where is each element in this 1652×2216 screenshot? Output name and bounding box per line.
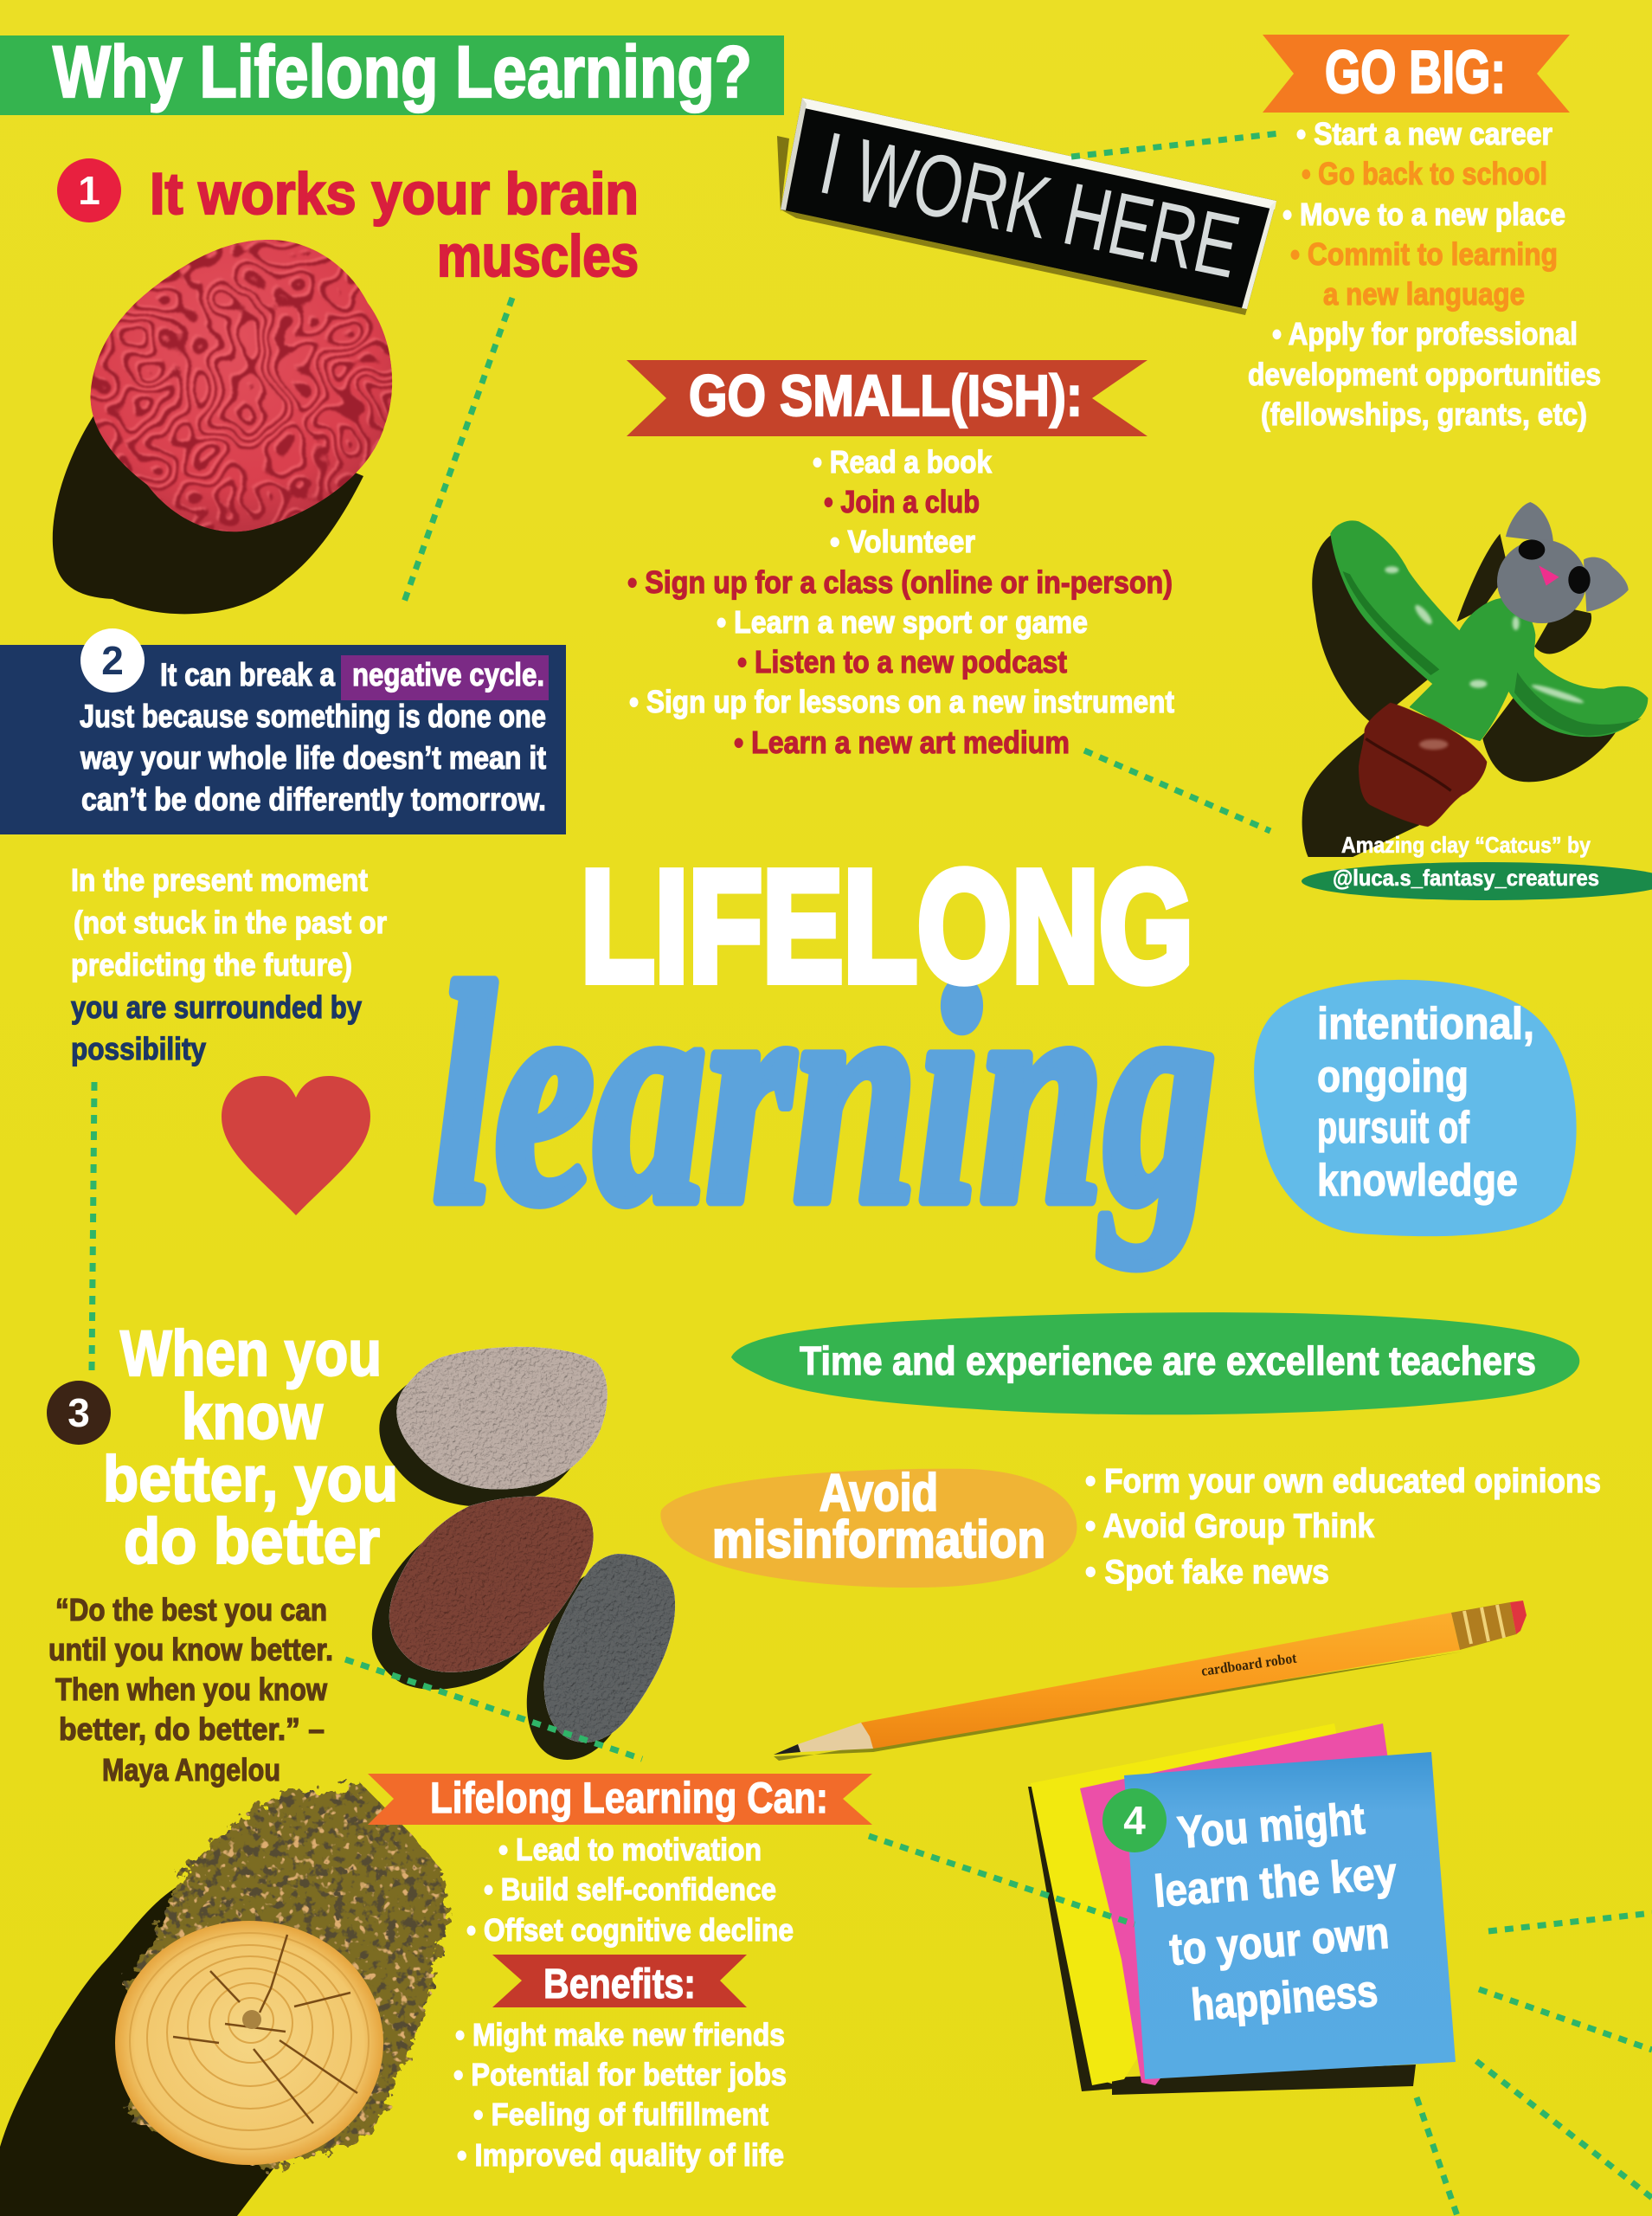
dotted connector (345, 1659, 642, 1759)
blob: definition: pursuit of (1317, 1103, 1469, 1153)
body text: can’t be done differently tomorrow. (81, 782, 546, 817)
list: avoid misinformation (1085, 1463, 1601, 1591)
list: • Sign up for a class (online or in-person) (627, 564, 1173, 600)
main title: learning (433, 920, 1216, 1268)
list: benefits (453, 2017, 787, 2173)
number badge 2: 2 (101, 638, 124, 683)
text block: present moment: predicting the future) (71, 947, 352, 982)
text block: present moment: possibility (71, 1031, 206, 1066)
list: can (466, 1832, 794, 1948)
panel: go small (627, 360, 1174, 760)
body text (80, 657, 546, 817)
list: • Volunteer (830, 524, 975, 559)
note text: to your own (1167, 1908, 1391, 1975)
list: can: • Build self-confidence (484, 1871, 776, 1907)
wood slice photo (0, 1781, 448, 2216)
note text (1152, 1794, 1398, 2031)
list: • Learn a new sport or game (717, 604, 1088, 640)
caption: catcus credit: Amazing clay “Catcus” by (1341, 832, 1591, 858)
list: • Start a new career (1296, 116, 1552, 151)
heading: it works your brain muscles (150, 161, 639, 289)
list: • Read a book (813, 444, 993, 480)
quote (48, 1592, 333, 1788)
text block: present moment: (not stuck in the past or (74, 905, 387, 940)
list: • Move to a new place (1282, 196, 1565, 232)
quote: better, do better.” – (59, 1711, 325, 1747)
blob: avoid misinformation: misinformation (712, 1511, 1045, 1569)
panel: lifelong learning can (0, 1774, 872, 2216)
list: • Listen to a new podcast (737, 644, 1067, 680)
ribbon heading: GO SMALL(ISH): (689, 364, 1083, 428)
number badge 4 (1102, 1788, 1167, 1852)
list: development opportunities (1248, 357, 1601, 392)
list: • Join a club (824, 484, 980, 519)
body text: It can break a (160, 657, 335, 692)
heading: when you know better: When you (120, 1317, 382, 1389)
dotted connector (1071, 133, 1280, 157)
quote: Then when you know (55, 1672, 328, 1707)
text block: present moment: In the present moment (71, 862, 368, 898)
ribbon: benefits: Benefits: (543, 1962, 696, 2007)
list: (fellowships, grants, etc) (1261, 396, 1587, 432)
name badge photo: I work here (777, 98, 1276, 315)
panel: go big (1248, 35, 1601, 432)
list: • Sign up for lessons on a new instrument (629, 684, 1174, 719)
list: benefits: • Improved quality of life (457, 2137, 784, 2173)
note text: learn the key (1152, 1848, 1398, 1917)
body text: Just because something is done one (80, 699, 546, 734)
heading: when you know better: better, you (103, 1443, 398, 1515)
blob: avoid misinformation: Avoid (820, 1464, 938, 1522)
main title: LIFELONG (581, 837, 1193, 1015)
brain photo (53, 240, 392, 614)
blob: time and experience (731, 1312, 1579, 1414)
list: • Learn a new art medium (734, 725, 1070, 760)
blob: definition: intentional, (1317, 999, 1534, 1049)
list: benefits: • Might make new friends (455, 2017, 785, 2052)
main title (433, 837, 1216, 1268)
panel: reason 4 sticky notes (1028, 1723, 1456, 2095)
list: avoid misinformation: • Form your own educated opinions (1085, 1463, 1601, 1500)
number badge 3: 3 (67, 1390, 90, 1435)
note text: happiness (1189, 1966, 1379, 2031)
ribbon heading (1263, 35, 1570, 113)
note shadow (1028, 1787, 1416, 2095)
list: avoid misinformation: • Spot fake news (1085, 1554, 1329, 1591)
heading: when you know better: do better (124, 1505, 380, 1577)
yellow note (1031, 1723, 1337, 2085)
list (627, 444, 1174, 760)
quote: Maya Angelou (102, 1752, 280, 1788)
number badge 4: 4 (1123, 1798, 1146, 1843)
panel: reason 1 (53, 158, 639, 614)
list: benefits: • Potential for better jobs (453, 2057, 787, 2092)
stones photo (372, 1347, 675, 1760)
dotted connectors around note (869, 1836, 1652, 2216)
blob: time and experience: Time and experience are excellent teachers (800, 1338, 1536, 1383)
number badge 1 (57, 158, 121, 222)
pink note (1080, 1723, 1389, 2085)
ribbon: lifelong learning can: Lifelong Learning Can: (430, 1774, 828, 1822)
note text: You might (1175, 1794, 1366, 1858)
list: a new language (1323, 276, 1525, 312)
body text: way your whole life doesn’t mean it (80, 740, 546, 776)
quote: until you know better. (48, 1632, 333, 1667)
clay catcus photo (1302, 502, 1647, 857)
caption: catcus credit: @luca.s_fantasy_creatures (1333, 865, 1599, 891)
number badge 1: 1 (78, 168, 100, 213)
pencil photo (774, 1601, 1527, 1761)
heading: when you know better (103, 1317, 398, 1577)
blob: definition: knowledge (1317, 1156, 1518, 1206)
name badge photo: I work here: I WORK HERE (813, 113, 1247, 297)
list: can: • Offset cognitive decline (466, 1912, 794, 1948)
dotted connector (92, 1082, 94, 1371)
panel: reason 3 (47, 1317, 675, 1788)
heading: it works your brain muscles: It works your brain (150, 161, 639, 227)
number badge 2 (80, 628, 145, 692)
icon: heart (222, 1076, 370, 1215)
blob: definition (1254, 980, 1577, 1236)
list: • Commit to learning (1290, 236, 1558, 272)
blob: avoid misinformation (660, 1464, 1077, 1588)
list: can: • Lead to motivation (498, 1832, 762, 1867)
highlight: negative cycle: negative cycle. (352, 657, 544, 692)
title banner: Why Lifelong Learning? (53, 31, 752, 113)
highlight: negative cycle (341, 655, 549, 700)
panel: reason 2 (0, 628, 566, 834)
dotted connector (403, 298, 512, 604)
number badge 3 (47, 1381, 111, 1445)
list: • Go back to school (1302, 156, 1547, 191)
pencil photo: cardboard robot (1200, 1650, 1298, 1679)
list: avoid misinformation: • Avoid Group Think (1085, 1508, 1374, 1545)
caption: catcus credit (1302, 832, 1652, 900)
blue note (1124, 1752, 1456, 2079)
list: benefits: • Feeling of fulfillment (473, 2097, 768, 2132)
blob: definition: ongoing (1317, 1052, 1469, 1102)
dotted connector (1084, 750, 1270, 831)
list (1248, 116, 1601, 432)
ribbon: benefits (492, 1955, 747, 2007)
text block: present moment (71, 862, 387, 1066)
heading: when you know better: know (182, 1381, 323, 1453)
list: • Apply for professional (1272, 316, 1578, 351)
heading: it works your brain muscles: muscles (437, 223, 639, 289)
ribbon heading: GO BIG: (1325, 38, 1506, 106)
text block: present moment: you are surrounded by (71, 989, 362, 1025)
quote: “Do the best you can (55, 1592, 327, 1627)
